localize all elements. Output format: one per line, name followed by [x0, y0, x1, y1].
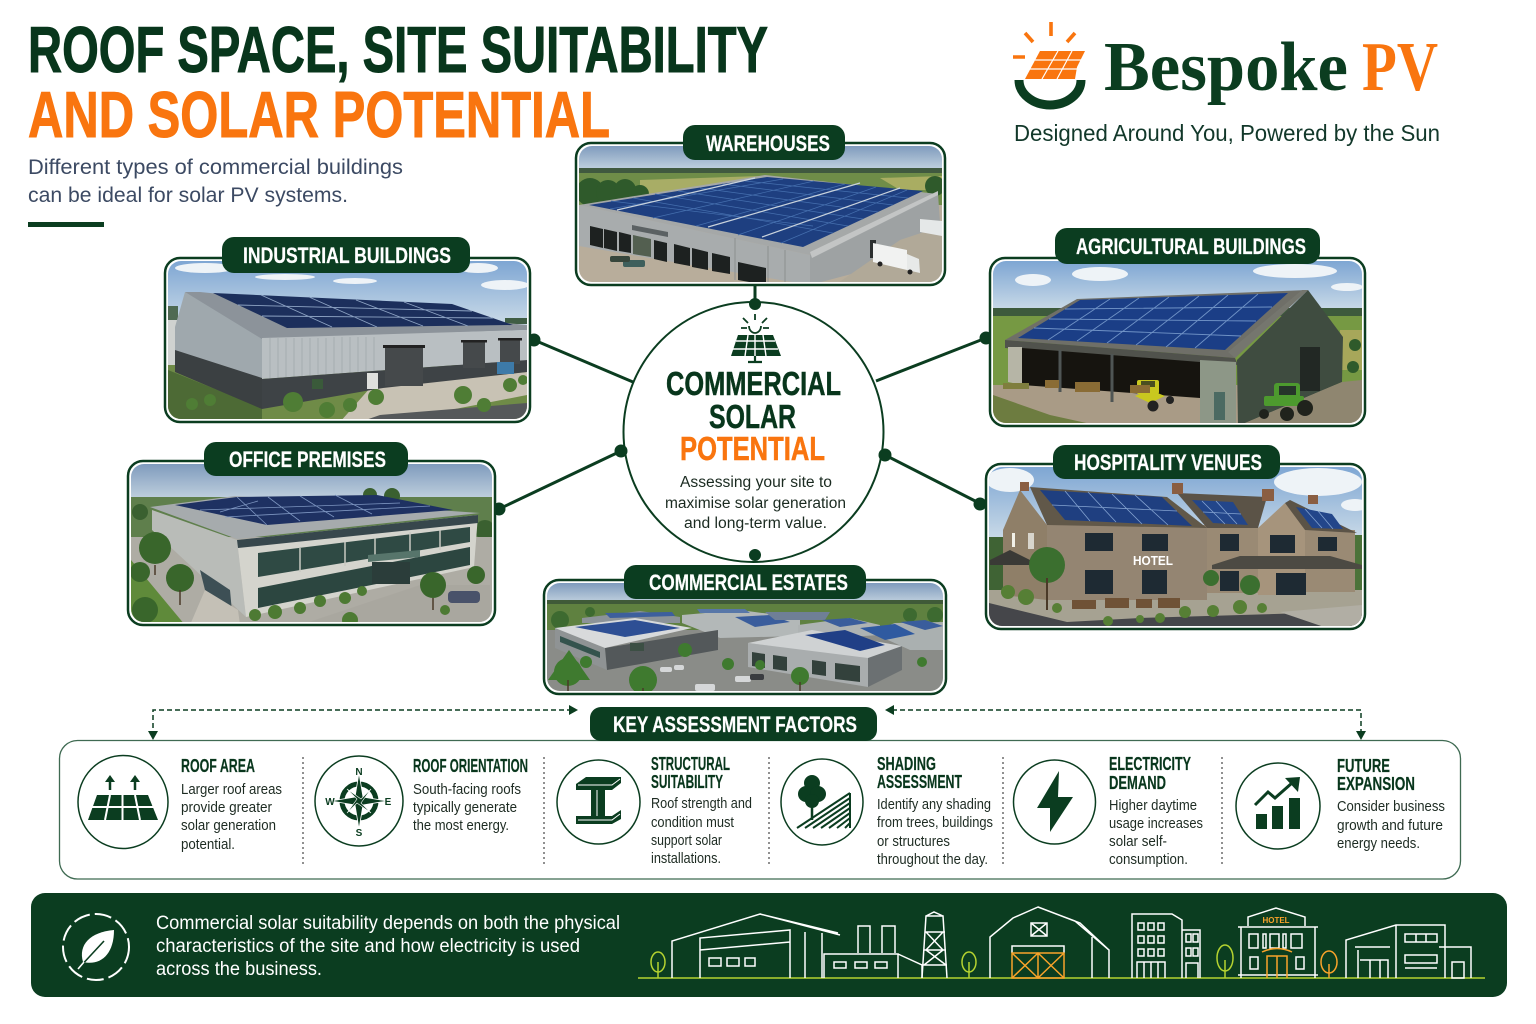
heading: key assessment factors: KEY ASSESSMENT FACTORS	[613, 712, 857, 737]
label pill: warehouses: WAREHOUSES	[706, 131, 830, 156]
icon: compass: W	[325, 797, 335, 808]
photo: agricultural barn with rooftop solar	[993, 261, 1363, 426]
photo: commercial estate aerial	[547, 583, 945, 694]
factor: future expansion: Consider business	[1337, 799, 1445, 815]
factor: roof area: ROOF AREA	[181, 755, 255, 776]
factor: roof orientation	[315, 755, 528, 846]
factor: future expansion: energy needs.	[1337, 836, 1420, 852]
factor: shading assessment: or structures	[877, 834, 950, 850]
icon: compass: E	[385, 797, 392, 808]
panel: office premises	[128, 442, 495, 628]
factor: structural suitability: SUITABILITY	[651, 771, 723, 792]
factor: roof orientation: ROOF ORIENTATION	[413, 755, 528, 776]
factor: structural suitability: STRUCTURAL	[651, 753, 730, 774]
panel: central commercial solar potential: Assessing your site to	[680, 474, 832, 491]
factor: electricity demand: DEMAND	[1109, 772, 1166, 793]
factor: roof area: potential.	[181, 837, 235, 853]
icon: leaf in dashed circle	[63, 914, 129, 980]
logo: Bespoke PV	[1013, 22, 1440, 146]
label pill: office premises: OFFICE PREMISES	[229, 447, 386, 472]
photo: office with rooftop solar	[130, 464, 495, 628]
panel: commercial estates	[544, 565, 946, 694]
panel: central commercial solar potential: maximise solar generation	[665, 495, 846, 512]
barn outline	[990, 907, 1109, 978]
title: AND SOLAR POTENTIAL	[28, 78, 610, 151]
tractors	[1135, 380, 1165, 403]
subtitle: can be ideal for solar PV systems.	[28, 183, 348, 207]
far buildings	[582, 611, 680, 623]
icon: compass	[315, 756, 403, 846]
factor: roof orientation: South-facing roofs	[413, 782, 521, 798]
label pill: hospitality venues: HOSPITALITY VENUES	[1074, 450, 1262, 475]
factor: shading assessment	[781, 753, 993, 868]
icon: solar panel with sun	[731, 314, 781, 362]
title: ROOF SPACE, SITE SUITABILITY	[28, 13, 768, 86]
panel: bottom summary banner	[31, 893, 1507, 997]
trees	[651, 945, 1233, 978]
panel: hospitality venues	[986, 445, 1369, 629]
summary text: Commercial solar suitability depends on both the physical	[156, 913, 620, 934]
factor: electricity demand: Higher daytime	[1109, 798, 1197, 814]
factor: electricity demand: ELECTRICITY	[1109, 753, 1191, 774]
connector lines	[492, 285, 992, 516]
factor: roof orientation: typically generate	[413, 800, 517, 816]
icon: logo sun and panel	[1013, 22, 1085, 105]
factor: structural suitability: Roof strength and	[651, 796, 752, 812]
warehouse outline	[672, 914, 840, 978]
factor: structural suitability: installations.	[651, 851, 721, 867]
icon: tree shading	[781, 759, 863, 845]
panel: agricultural buildings	[990, 228, 1365, 426]
factor: future expansion: growth and future	[1337, 818, 1443, 834]
label pill: warehouses	[683, 125, 845, 160]
heading: key assessment factors	[590, 707, 877, 741]
hotel outline	[1238, 908, 1318, 978]
factor: roof orientation: the most energy.	[413, 818, 509, 834]
factor: future expansion: EXPANSION	[1337, 773, 1415, 794]
icon: compass: N	[355, 767, 363, 778]
title	[28, 13, 768, 151]
arrow: dashed bracket left	[148, 705, 578, 740]
factor: roof area: Larger roof areas	[181, 782, 282, 798]
logo: Bespoke PV: Bespoke	[1104, 29, 1348, 106]
factor: shading assessment: SHADING	[877, 753, 936, 774]
factor: electricity demand	[1014, 753, 1203, 868]
photo: hotel with rooftop solar	[986, 467, 1369, 629]
factory outline	[824, 912, 947, 978]
factor: roof area: provide greater	[181, 800, 272, 816]
modern office outline	[1346, 925, 1471, 978]
icon: steel beam	[557, 760, 640, 844]
icon: lightning bolt	[1014, 760, 1096, 844]
summary text: characteristics of the site and how electricity is used	[156, 936, 580, 957]
factor: structural suitability: condition must	[651, 815, 734, 831]
photo: industrial building with rooftop solar	[168, 261, 529, 422]
logo: Bespoke PV: Designed Around You, Powered by the Sun	[1014, 120, 1440, 146]
photo: warehouse with rooftop solar	[576, 146, 945, 285]
illustration: building skyline	[638, 907, 1485, 978]
factor: future expansion: FUTURE	[1337, 755, 1390, 776]
summary text	[156, 913, 620, 980]
subtitle	[28, 155, 403, 227]
hotel sign: HOTEL	[1133, 554, 1173, 568]
factor: shading assessment: from trees, buildings	[877, 815, 993, 831]
label pill: commercial estates	[624, 565, 866, 599]
label pill: industrial buildings	[222, 237, 470, 273]
panel: central commercial solar potential: SOLAR	[709, 398, 796, 435]
panel: central commercial solar potential	[614, 298, 892, 562]
label pill: agricultural buildings: AGRICULTURAL BUILDINGS	[1076, 234, 1306, 259]
office block outline	[1132, 914, 1200, 978]
panel: central commercial solar potential: POTENTIAL	[680, 430, 825, 467]
summary text: across the business.	[156, 959, 322, 980]
factor: shading assessment: throughout the day.	[877, 852, 988, 868]
factor: structural suitability: support solar	[651, 833, 722, 849]
panel: central commercial solar potential: COMMERCIAL	[666, 365, 841, 402]
factor: structural suitability	[557, 753, 752, 867]
arrow: dashed bracket right	[885, 705, 1366, 740]
icon: roof area	[78, 756, 168, 848]
hotel outline: HOTEL	[1262, 916, 1290, 925]
label pill: commercial estates: COMMERCIAL ESTATES	[649, 570, 848, 595]
logo: Bespoke PV: PV	[1362, 29, 1438, 106]
label pill: office premises	[204, 442, 408, 476]
factor: electricity demand: consumption.	[1109, 852, 1188, 868]
factor: electricity demand: solar self-	[1109, 834, 1167, 850]
label pill: hospitality venues	[1053, 445, 1280, 479]
panel: key assessment factors	[60, 707, 1460, 879]
icon: compass: S	[356, 828, 363, 839]
panel: industrial buildings	[165, 237, 530, 422]
subtitle: Different types of commercial buildings	[28, 155, 403, 179]
right building	[748, 643, 868, 687]
factor: shading assessment: Identify any shading	[877, 797, 991, 813]
icon: growth chart	[1236, 763, 1320, 849]
label pill: industrial buildings: INDUSTRIAL BUILDINGS	[243, 243, 451, 268]
factor: shading assessment: ASSESSMENT	[877, 771, 962, 792]
factor: roof area: solar generation	[181, 818, 276, 834]
factor: roof area	[78, 755, 282, 853]
left building	[555, 628, 607, 670]
factor: electricity demand: usage increases	[1109, 816, 1203, 832]
panel: warehouses	[576, 125, 945, 285]
factor: future expansion	[1236, 755, 1445, 852]
label pill: agricultural buildings	[1055, 228, 1320, 264]
panel: central commercial solar potential: and long-term value.	[684, 515, 827, 532]
